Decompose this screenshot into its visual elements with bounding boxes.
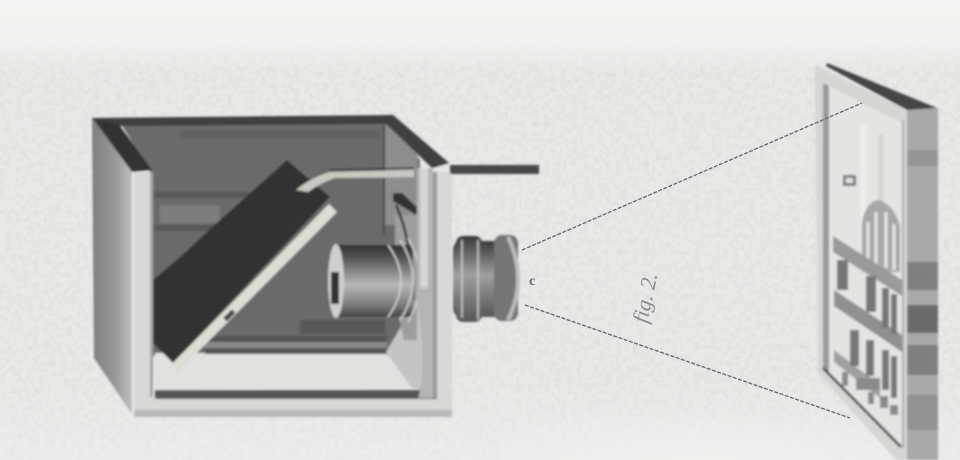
light rays — [522, 103, 862, 418]
panel top edge — [826, 63, 937, 110]
front frame — [132, 172, 452, 417]
back wall interior — [120, 122, 420, 356]
camera box — [92, 115, 539, 417]
small dark bracket — [393, 193, 424, 216]
top rod — [450, 165, 539, 174]
back wall lower band — [205, 336, 387, 354]
mirror white edge — [171, 204, 337, 372]
hanging lantern — [843, 175, 856, 186]
right frame strip — [417, 168, 433, 398]
box top edge — [92, 115, 449, 172]
panel picture — [823, 83, 902, 447]
panel right edge — [907, 108, 938, 460]
inner lens tube — [338, 245, 413, 317]
hinge arm — [296, 170, 414, 192]
panel frame — [815, 65, 907, 460]
label: lens letter: c — [529, 274, 535, 289]
inner right wall — [386, 300, 433, 392]
projected image panel — [815, 63, 938, 460]
label: figure number: fig. 2. — [627, 270, 662, 325]
box left side wall — [92, 118, 134, 417]
dome — [862, 200, 900, 272]
box floor — [155, 353, 418, 390]
building storeys — [833, 236, 902, 296]
outer lens — [453, 235, 518, 322]
mirror back — [153, 160, 330, 363]
back wall shading bands — [152, 130, 385, 334]
